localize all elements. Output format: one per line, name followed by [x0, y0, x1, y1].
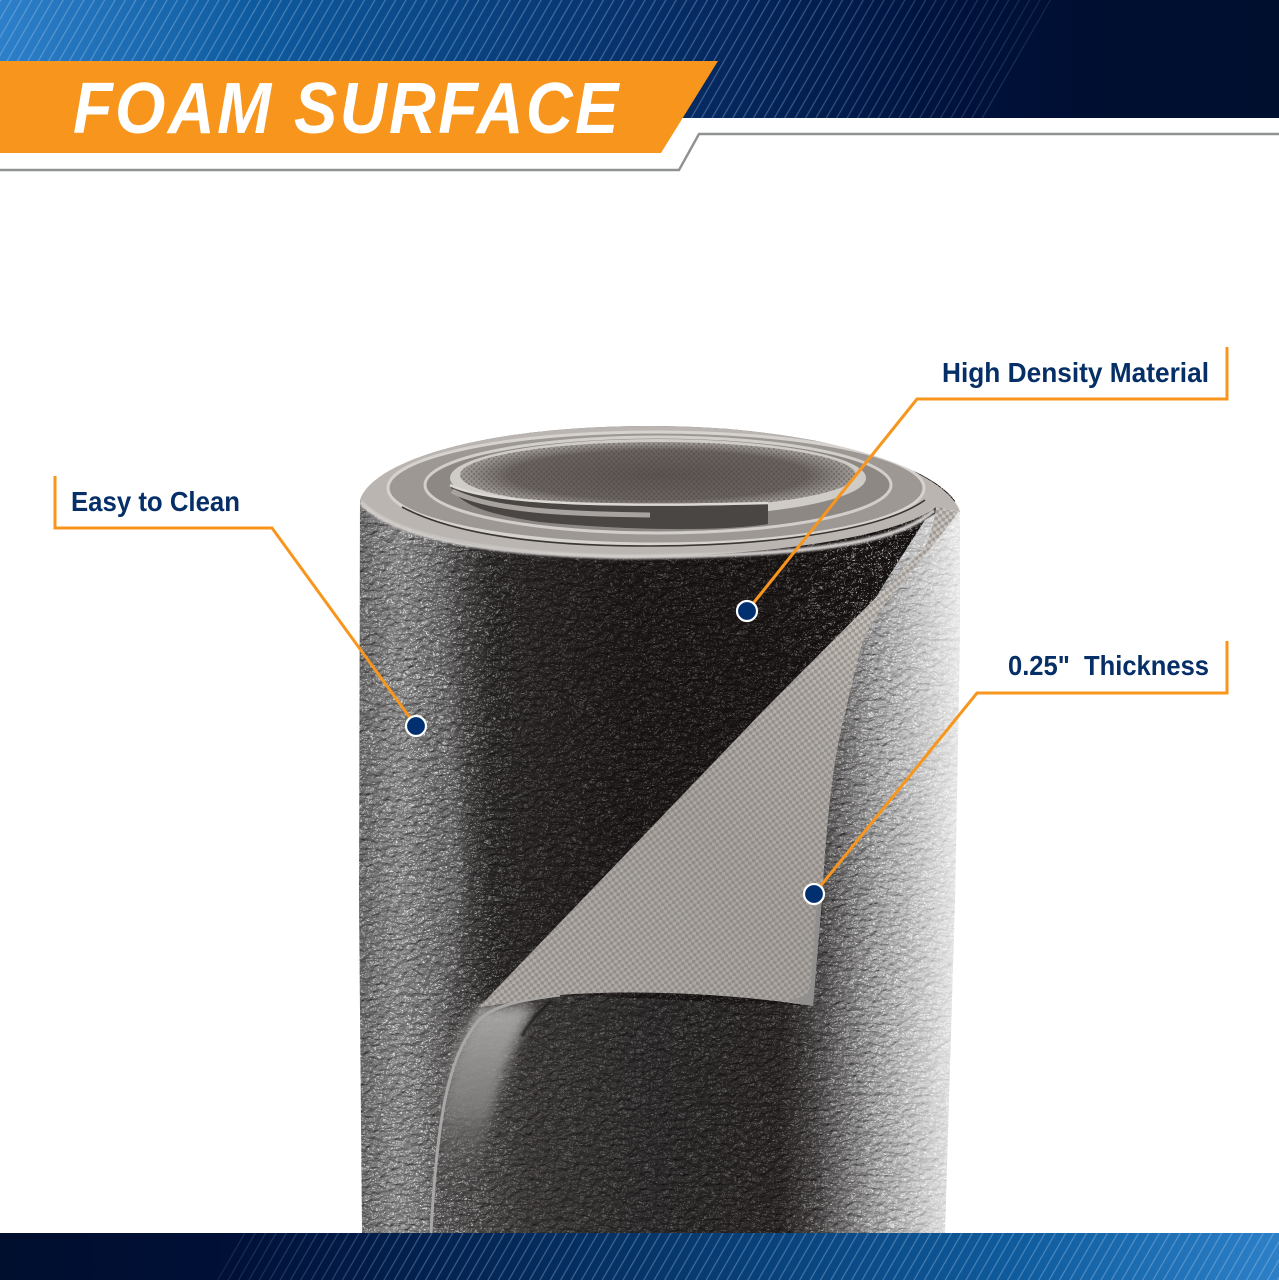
- ring dark lines: [402, 500, 925, 546]
- flap back face: [470, 500, 970, 1020]
- callout: High Density Material: [737, 347, 1227, 621]
- mat body lower: [434, 908, 825, 1233]
- title: FOAM SURFACE: [73, 68, 621, 149]
- front edge highlight: [360, 502, 934, 557]
- mat body upper: [355, 420, 965, 1240]
- callout text: Easy to Clean: [71, 486, 240, 517]
- callout text: High Density Material: [942, 357, 1209, 388]
- callout: Easy to Clean: [55, 476, 426, 736]
- leather highlights: [355, 420, 965, 1240]
- callout marker: [737, 601, 757, 621]
- callout marker: [406, 716, 426, 736]
- callout: 0.25 inch Thickness: [804, 641, 1227, 904]
- rim ring A: [388, 432, 924, 544]
- curl edge: [431, 995, 560, 1233]
- leather relief: [359, 500, 958, 1233]
- rim ring B: [425, 437, 891, 533]
- callout text: 0.25" Thickness: [1008, 650, 1209, 681]
- curled underside: [430, 998, 540, 1184]
- crease shadow: [522, 1000, 552, 1036]
- inner core: [450, 439, 866, 517]
- callout marker: [804, 884, 824, 904]
- title banner: [0, 61, 718, 153]
- right silver side: [813, 495, 970, 1240]
- header band: [0, 0, 1279, 118]
- left silver side: [350, 480, 462, 1250]
- inner mat end: [450, 485, 768, 529]
- rim outer: [360, 426, 960, 557]
- flap cut edge: [790, 900, 822, 1006]
- header white notch and grey rule: [0, 118, 1279, 170]
- footer band: [0, 1233, 1279, 1280]
- product photo: rolled foam mat: [350, 420, 970, 1250]
